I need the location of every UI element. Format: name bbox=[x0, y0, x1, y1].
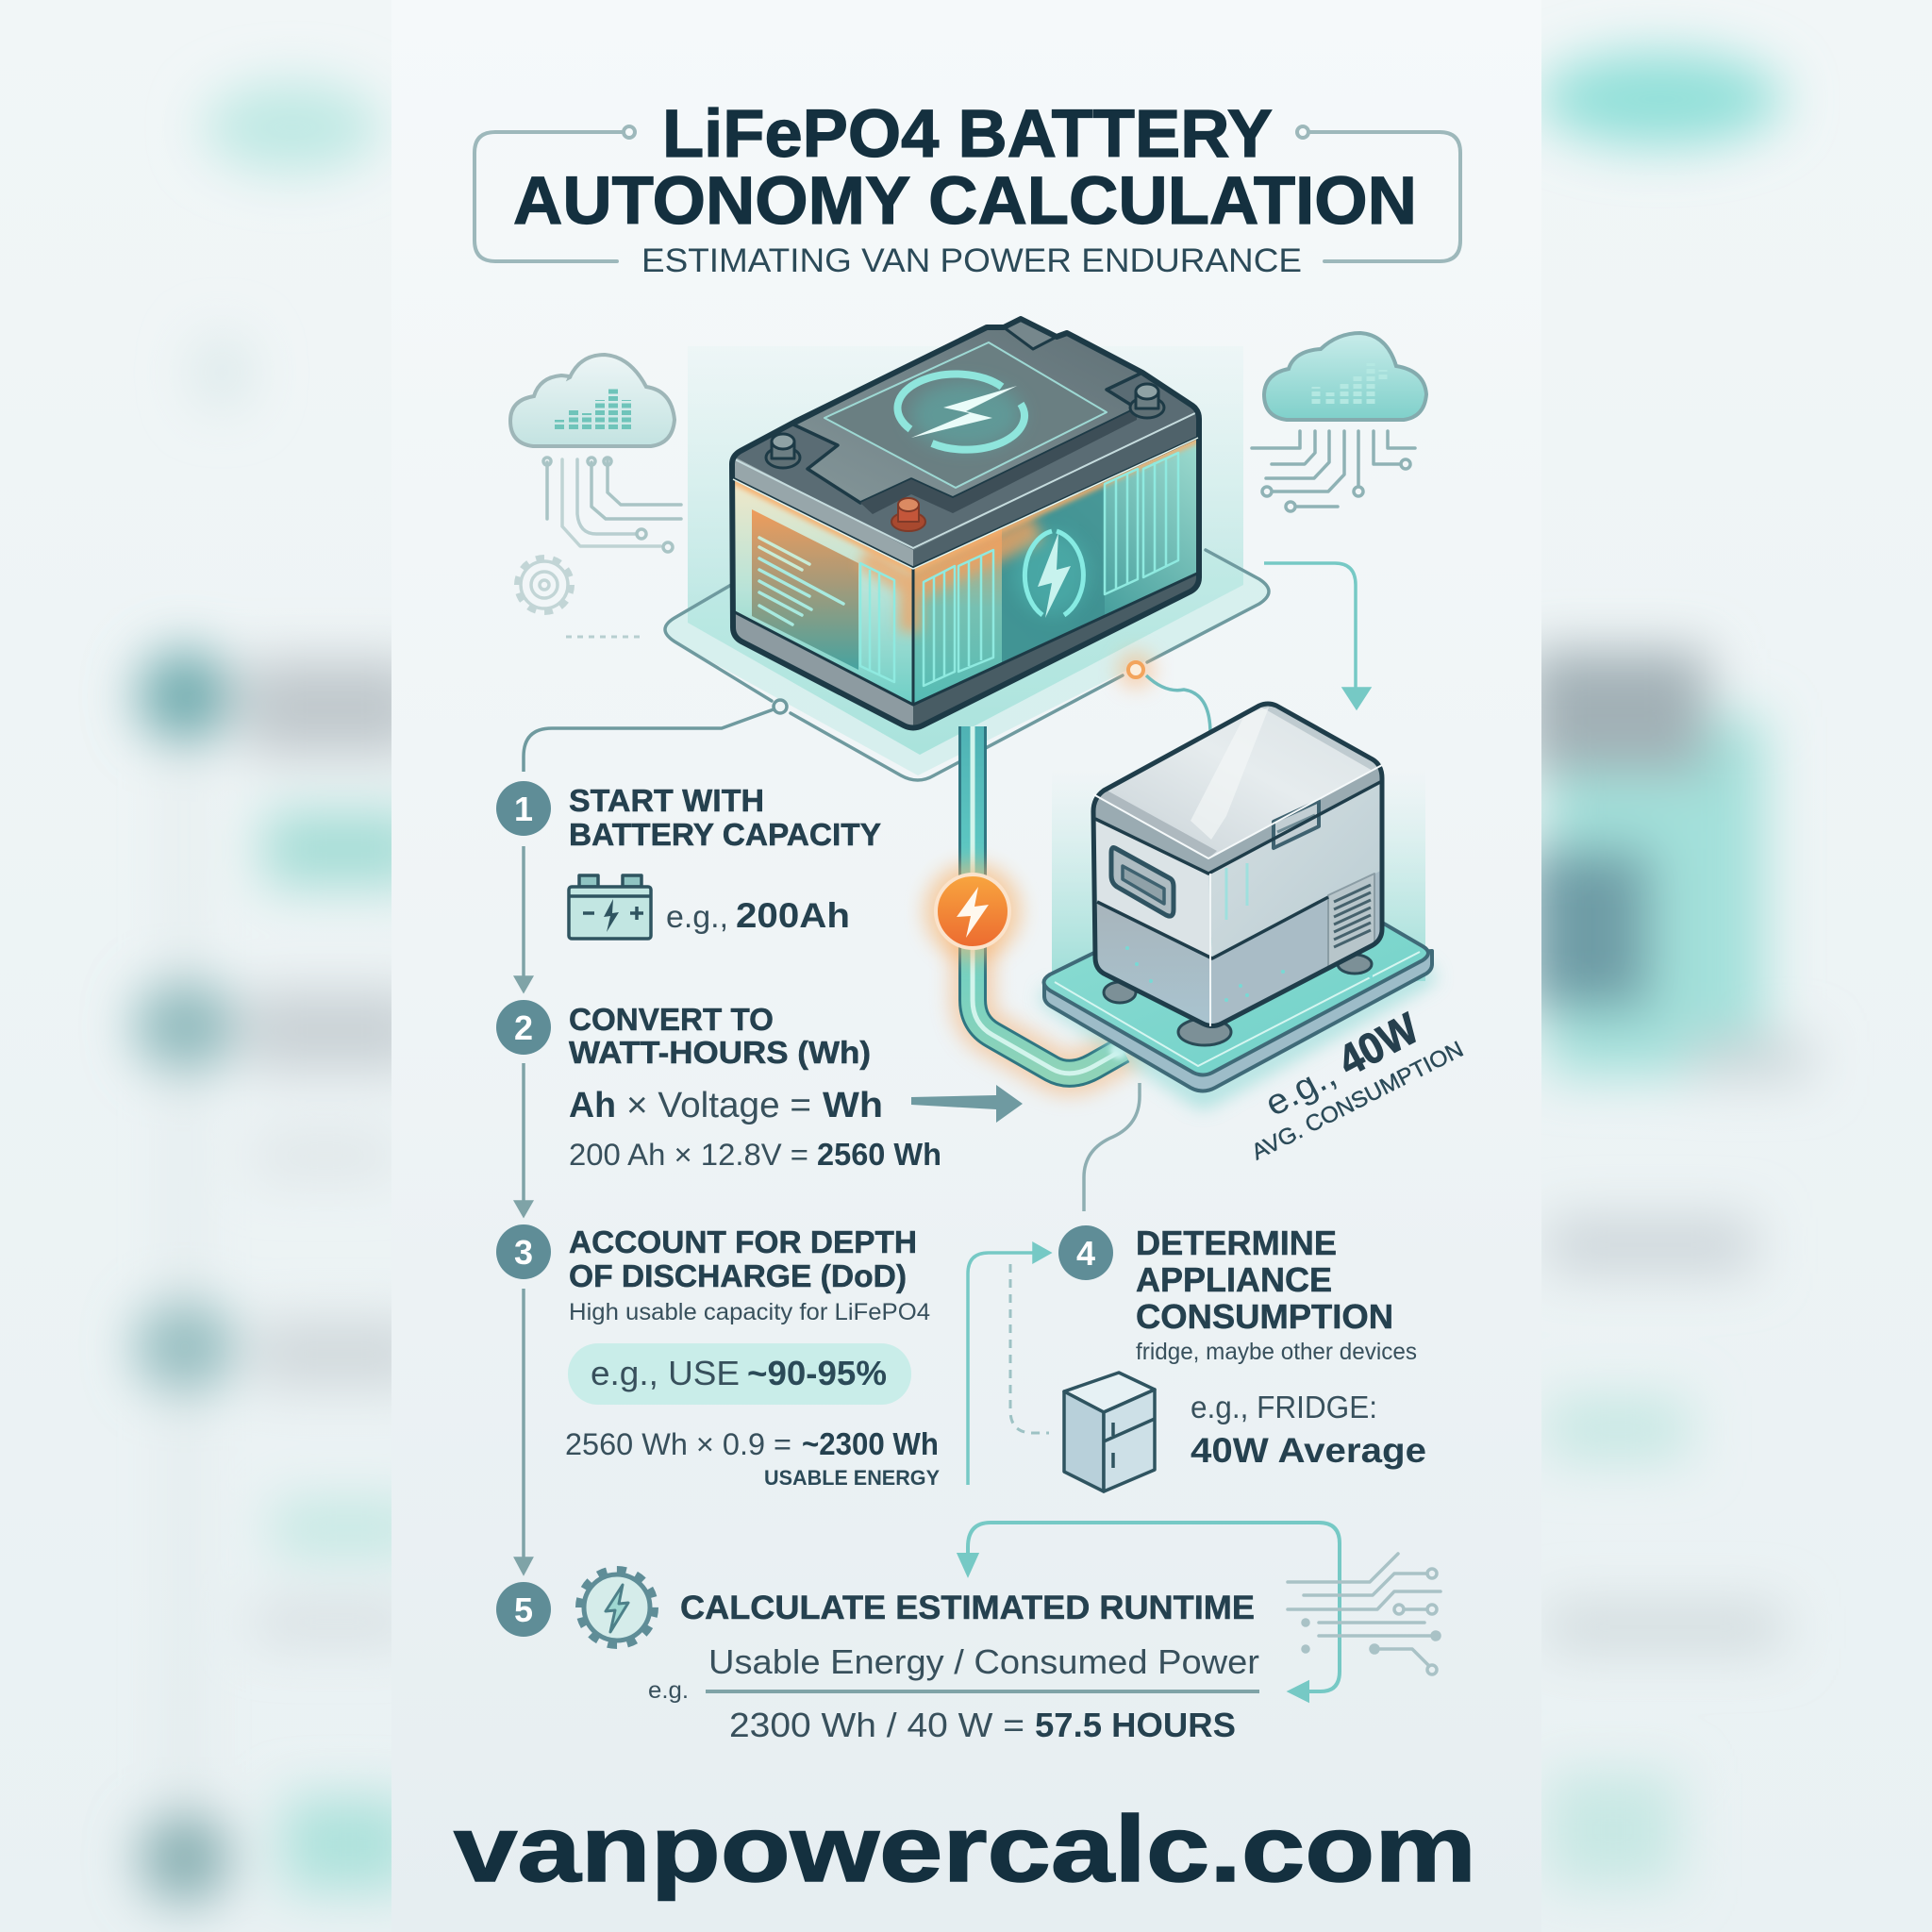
heading: CALCULATE ESTIMATED RUNTIME bbox=[680, 1590, 1255, 1626]
arrow down bbox=[516, 846, 531, 991]
connector: battery to step 1 bbox=[524, 709, 774, 772]
platform outline under battery bbox=[665, 550, 1269, 780]
connector arrow into step 4 bbox=[968, 1244, 1049, 1485]
heading: OF DISCHARGE (DoD) bbox=[569, 1258, 907, 1293]
central panel bbox=[391, 0, 1541, 1932]
example value bbox=[1191, 1390, 1426, 1470]
step 2 bbox=[496, 1000, 1023, 1215]
glass front right bbox=[913, 437, 1199, 705]
icon: gear with bolt bbox=[579, 1570, 655, 1645]
highlight pill: e.g., USE bbox=[591, 1354, 740, 1392]
calculation: 2560 Wh bbox=[817, 1137, 941, 1172]
step number bbox=[496, 1582, 551, 1637]
usable energy caption: USABLE ENERGY bbox=[764, 1466, 940, 1490]
step 5 bbox=[496, 1570, 1259, 1744]
base band bbox=[733, 611, 913, 729]
step number bbox=[1058, 1225, 1113, 1280]
heading: DETERMINE bbox=[1136, 1224, 1337, 1262]
side emblem bbox=[1014, 532, 1090, 615]
glass front left bbox=[733, 478, 913, 705]
calculation: ~2300 Wh bbox=[802, 1426, 939, 1461]
title line 1: LiFePO4 BATTERY bbox=[662, 97, 1273, 172]
heading bbox=[1136, 1224, 1393, 1336]
step number bbox=[496, 781, 551, 836]
heading: ACCOUNT FOR DEPTH bbox=[569, 1224, 917, 1259]
formula: Wh bbox=[823, 1086, 883, 1125]
vent bbox=[1328, 874, 1374, 967]
arrow down bbox=[516, 1063, 531, 1215]
heading bbox=[569, 1002, 871, 1070]
title frame bbox=[475, 126, 1460, 261]
heading: CONVERT TO bbox=[569, 1002, 774, 1037]
connector loop to step 5 bbox=[959, 1523, 1340, 1700]
caption: AVG. CONSUMPTION bbox=[1247, 1037, 1468, 1165]
calculation bbox=[569, 1137, 941, 1172]
e.g. label: e.g. bbox=[648, 1677, 689, 1704]
circuit decoration bottom right bbox=[1288, 1554, 1441, 1674]
fraction bar bbox=[706, 1690, 1259, 1693]
step number: 2 bbox=[514, 1008, 533, 1047]
top plate bbox=[732, 327, 1199, 550]
cell text lines bbox=[759, 538, 843, 625]
title line 2: AUTONOMY CALCULATION bbox=[513, 164, 1417, 239]
icon: fridge bbox=[1064, 1373, 1155, 1491]
upper body bbox=[1095, 819, 1212, 958]
step number bbox=[496, 1000, 551, 1055]
cloud icon bbox=[510, 355, 675, 446]
website footer: vanpowercalc.com bbox=[454, 1796, 1476, 1901]
step number bbox=[496, 1224, 551, 1279]
heading: START WITH bbox=[569, 783, 764, 818]
circuit lines bbox=[1252, 431, 1415, 511]
step 1 bbox=[496, 781, 881, 991]
latch bbox=[1274, 801, 1319, 848]
cloud icon bbox=[1264, 333, 1426, 420]
formula: Ah bbox=[569, 1086, 616, 1125]
right cloud with circuit bbox=[1252, 333, 1426, 511]
example value: e.g., bbox=[666, 899, 728, 934]
lid screen bbox=[824, 342, 1107, 488]
title block bbox=[475, 97, 1460, 279]
heading bbox=[569, 1224, 917, 1293]
connector: step 4 to fridge bbox=[1084, 1083, 1140, 1211]
battery glow backdrop bbox=[688, 346, 1243, 755]
example value bbox=[666, 896, 850, 935]
step number: 4 bbox=[1076, 1234, 1095, 1273]
value bbox=[1255, 1003, 1426, 1125]
arrow down bbox=[516, 1289, 531, 1573]
icon: battery bbox=[569, 875, 651, 939]
step 3 bbox=[496, 1224, 940, 1573]
terminals bbox=[766, 384, 1164, 468]
step 4 bbox=[968, 1224, 1426, 1491]
lightning node on cable bbox=[924, 862, 1022, 960]
result: 57.5 HOURS bbox=[1035, 1706, 1236, 1744]
battery fills bbox=[735, 375, 1196, 724]
handle bbox=[1111, 848, 1174, 916]
example value: e.g., FRIDGE: bbox=[1191, 1390, 1377, 1424]
blurred left side panel bbox=[100, 63, 391, 1932]
formula: × Voltage = bbox=[626, 1086, 811, 1125]
arrow to fridge bbox=[911, 1085, 1023, 1123]
lower body bbox=[1095, 902, 1212, 1028]
top band bbox=[732, 456, 913, 568]
heading: BATTERY CAPACITY bbox=[569, 817, 881, 852]
lid band bbox=[1093, 765, 1382, 874]
lid bbox=[793, 319, 1142, 503]
fridge outline bbox=[1093, 704, 1382, 1026]
calculation: 200 Ah × 12.8V = bbox=[569, 1138, 808, 1172]
fridge platform bbox=[1043, 920, 1432, 1099]
step number: 5 bbox=[514, 1591, 533, 1629]
calculation bbox=[565, 1426, 939, 1461]
feet bbox=[1104, 955, 1372, 1045]
circuit lines bbox=[543, 458, 681, 552]
step number: 1 bbox=[514, 790, 533, 828]
formula numerator: Usable Energy / Consumed Power bbox=[708, 1642, 1259, 1681]
battery cells bbox=[860, 453, 1178, 686]
example value: 200Ah bbox=[736, 896, 850, 935]
left cloud with circuit bbox=[510, 355, 681, 637]
heading: CONSUMPTION bbox=[1136, 1297, 1393, 1336]
value: 40W bbox=[1330, 1003, 1426, 1086]
description: fridge, maybe other devices bbox=[1136, 1339, 1417, 1365]
orange interior glow bbox=[915, 528, 1038, 585]
battery illustration bbox=[732, 319, 1199, 729]
lid emblem bbox=[897, 374, 1024, 450]
orange node bbox=[1117, 651, 1155, 689]
step number: 3 bbox=[514, 1233, 533, 1272]
subtitle: ESTIMATING VAN POWER ENDURANCE bbox=[641, 242, 1302, 279]
highlight pill bbox=[568, 1343, 911, 1405]
heading bbox=[569, 783, 881, 852]
value: e.g., bbox=[1259, 1055, 1342, 1124]
power cable to fridge bbox=[973, 726, 1127, 1074]
calculation: 2560 Wh × 0.9 = bbox=[565, 1427, 791, 1461]
arrow: battery to fridge bbox=[1264, 563, 1369, 708]
fridge fills bbox=[1093, 702, 1382, 1028]
highlight pill: ~90-95% bbox=[747, 1354, 887, 1392]
heading: WATT-HOURS (Wh) bbox=[569, 1035, 871, 1070]
heading: APPLIANCE bbox=[1136, 1260, 1332, 1299]
dashed connector bbox=[1010, 1264, 1049, 1433]
fridge glow backdrop bbox=[1052, 769, 1425, 981]
gear bbox=[517, 558, 572, 612]
connector: orange node to fridge bbox=[1146, 675, 1210, 731]
orange seam glow bbox=[733, 439, 1199, 570]
description: High usable capacity for LiFePO4 bbox=[569, 1299, 930, 1325]
formula bbox=[569, 1086, 883, 1125]
blurred right side panel bbox=[1541, 23, 1824, 1920]
fridge consumption label bbox=[1247, 1003, 1468, 1165]
battery outline bbox=[732, 319, 1199, 728]
lid bbox=[1093, 702, 1382, 858]
fridge speckle bbox=[1125, 946, 1373, 1002]
result: 2300 Wh / 40 W = bbox=[729, 1706, 1024, 1744]
portable fridge illustration bbox=[1093, 702, 1382, 1045]
connector node bbox=[774, 700, 787, 713]
example value: 40W Average bbox=[1191, 1431, 1426, 1470]
result bbox=[729, 1706, 1236, 1744]
